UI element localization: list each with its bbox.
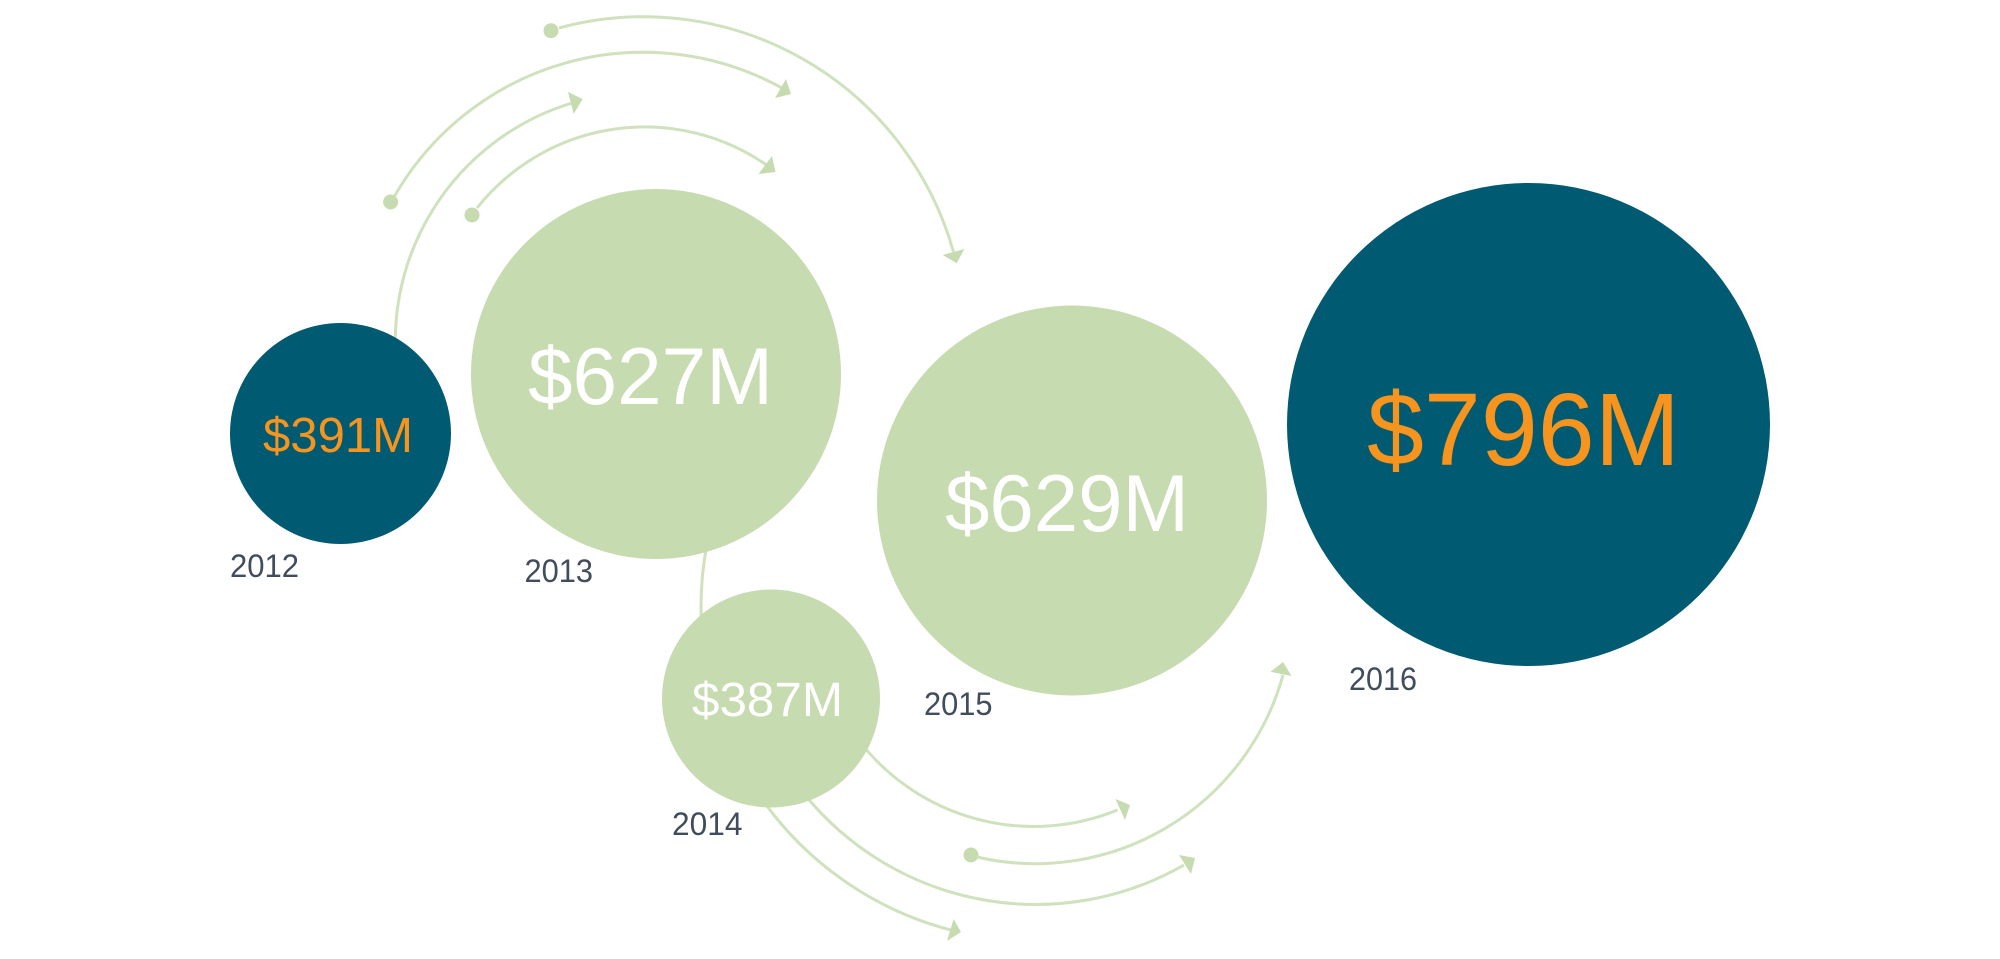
year label: 2016: 2016	[1349, 661, 1417, 697]
value: $387M: $387M	[692, 674, 843, 727]
value: $627M: $627M	[528, 332, 773, 422]
arrow: inner arc from dot to above 2013	[464, 127, 776, 222]
bubble: 2013	[471, 189, 841, 559]
bubble: 2015	[877, 306, 1267, 696]
arrow: long arc from 2013 circle behind 2014 to bottom	[701, 545, 961, 941]
bubble: 2012	[230, 323, 451, 544]
year label: 2015: 2015	[924, 686, 992, 722]
year label: 2014: 2014	[672, 806, 742, 842]
value: $796M: $796M	[1367, 372, 1680, 487]
value: $629M: $629M	[945, 459, 1189, 549]
arrow: arc from 2014 circle bottom right	[805, 795, 1195, 904]
bubble: 2016	[1287, 183, 1770, 666]
value: $391M: $391M	[263, 409, 413, 463]
arrow: second arc from dot to upper right	[383, 52, 791, 210]
year label: 2012: 2012	[230, 548, 299, 584]
arrow: arc from 2012 circle upward	[395, 92, 583, 383]
bubble: 2014	[662, 590, 880, 808]
arrow: arc from 2014 circle lower right	[860, 742, 1130, 826]
year label: 2013: 2013	[524, 553, 593, 589]
arrow: top arc from dot to 2015	[544, 17, 964, 263]
arrow: arc from dot up to 2016	[964, 662, 1292, 864]
